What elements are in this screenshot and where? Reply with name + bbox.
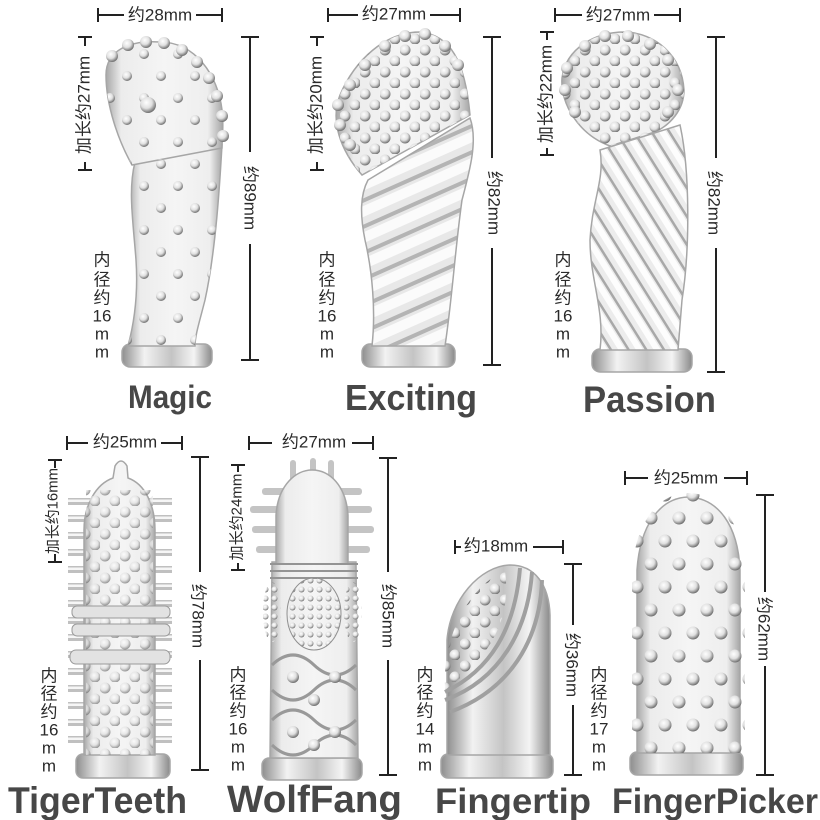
TigerTeeth base [76, 754, 170, 778]
WolfFang head [276, 470, 348, 564]
WolfFang inner diameter: 约 [230, 702, 246, 720]
Magic inner diameter: m [95, 324, 109, 344]
Passion inner diameter: 约 [554, 288, 572, 308]
Exciting extension dimension: 加长约20mm [306, 56, 326, 154]
Magic inner diameter: 16 [93, 306, 111, 326]
Magic inner diameter [93, 250, 111, 362]
Fingertip height dimension: 约36mm [562, 633, 582, 697]
WolfFang head spikes [250, 458, 374, 553]
WolfFang top width dimension: 约27mm [282, 432, 346, 452]
Exciting inner diameter: 径 [318, 270, 336, 290]
TigerTeeth body [84, 461, 155, 755]
Magic body bumps [128, 145, 222, 346]
Exciting base [362, 344, 455, 367]
product: Fingertip [441, 565, 553, 778]
WolfFang inner diameter: 内 [230, 666, 246, 684]
TigerTeeth height dimension: 约78mm [188, 584, 208, 648]
WolfFang inner diameter: m [231, 756, 245, 774]
TigerTeeth inner diameter: m [42, 756, 56, 776]
FingerPicker inner diameter: 径 [590, 684, 608, 702]
Passion extension dimension: 加长约22mm [536, 45, 556, 143]
Exciting head [332, 28, 470, 175]
FingerPicker inner diameter: 内 [590, 666, 608, 684]
Passion inner diameter: m [556, 324, 570, 344]
TigerTeeth name: TigerTeeth [8, 780, 187, 820]
Fingertip inner diameter: m [418, 738, 432, 756]
Passion inner diameter: 径 [554, 270, 572, 290]
Passion top width dimension: 约27mm [586, 6, 650, 24]
Exciting height dimension: 约82mm [484, 171, 504, 235]
TigerTeeth inner diameter: 内 [40, 666, 58, 686]
Fingertip inner diameter: 内 [416, 666, 434, 684]
Fingertip inner diameter [416, 666, 434, 774]
Passion top width dimension [555, 6, 680, 24]
FingerPicker body [637, 497, 740, 753]
WolfFang extension dimension: 加长约24mm [228, 474, 246, 560]
Fingertip curved bands [445, 568, 542, 712]
TigerTeeth top width dimension: 约25mm [93, 432, 157, 452]
TigerTeeth top width dimension [67, 432, 182, 452]
Fingertip inner diameter: 14 [416, 720, 434, 738]
Magic inner diameter: 径 [94, 270, 110, 290]
Exciting ribbed body [362, 118, 473, 346]
Magic inner diameter: 内 [94, 250, 110, 270]
WolfFang height dimension: 约85mm [378, 584, 398, 648]
Passion inner diameter: 16 [554, 306, 572, 326]
WolfFang top width dimension [249, 432, 373, 452]
Passion inner diameter [554, 250, 572, 362]
Exciting inner diameter: m [320, 342, 334, 362]
Fingertip top width dimension [455, 536, 563, 556]
product: Magic [106, 36, 229, 367]
Magic extension dimension: 加长约27mm [74, 56, 94, 154]
Exciting top width dimension: 约27mm [362, 4, 426, 24]
Exciting height dimension [483, 37, 504, 365]
WolfFang wavy bands [272, 655, 356, 755]
FingerPicker height dimension: 约62mm [754, 597, 774, 661]
Fingertip inner diameter: m [418, 756, 432, 774]
Fingertip inner diameter: 约 [416, 702, 434, 720]
WolfFang dotted oval [287, 578, 341, 650]
Fingertip body [447, 565, 550, 755]
TigerTeeth bumps [86, 490, 153, 755]
product: Passion [559, 30, 692, 372]
WolfFang inner diameter: m [231, 738, 245, 756]
Magic inner diameter: m [95, 342, 109, 362]
Exciting inner diameter: 约 [318, 288, 336, 308]
FingerPicker bumps [632, 493, 745, 753]
product: FingerPicker [630, 493, 745, 775]
Fingertip inner diameter: 径 [416, 684, 434, 702]
WolfFang bumps [287, 671, 341, 751]
Exciting inner diameter: 16 [318, 306, 336, 326]
Magic head [106, 42, 223, 165]
WolfFang rings [270, 564, 358, 578]
TigerTeeth inner diameter: 约 [40, 702, 58, 722]
FingerPicker base [630, 752, 743, 775]
FingerPicker inner diameter: 约 [590, 702, 608, 720]
Exciting inner diameter: m [320, 324, 334, 344]
product: WolfFang [250, 458, 374, 780]
Magic top width dimension [98, 6, 222, 24]
Passion height dimension [704, 37, 725, 372]
Passion height dimension: 约82mm [704, 171, 724, 235]
Exciting top width dimension [328, 4, 460, 24]
Passion ribbed body [590, 125, 688, 350]
Passion name: Passion [583, 379, 716, 420]
Magic height dimension [240, 37, 260, 360]
Fingertip bump patch [445, 570, 506, 690]
FingerPicker inner diameter: 17 [590, 720, 608, 738]
WolfFang body [270, 562, 358, 758]
product: TigerTeeth [68, 461, 172, 778]
WolfFang inner diameter [229, 666, 247, 774]
product: Exciting [332, 28, 473, 367]
Magic inner diameter: 约 [94, 288, 110, 308]
Magic base [122, 344, 212, 367]
FingerPicker height dimension [754, 495, 774, 775]
Fingertip base [441, 754, 553, 778]
Fingertip height dimension [562, 564, 582, 775]
Magic name: Magic [128, 379, 212, 415]
Fingertip name: Fingertip [435, 782, 591, 820]
TigerTeeth inner diameter: m [42, 738, 56, 758]
Fingertip top width dimension: 约18mm [464, 536, 528, 556]
Passion inner diameter: m [556, 342, 570, 362]
WolfFang base [262, 758, 362, 780]
WolfFang name: WolfFang [227, 779, 402, 820]
Magic height dimension: 约89mm [240, 166, 260, 230]
Magic top width dimension: 约28mm [128, 6, 192, 24]
WolfFang inner diameter: 16 [229, 720, 247, 738]
WolfFang inner diameter: 径 [230, 684, 246, 702]
FingerPicker inner diameter [590, 666, 608, 774]
FingerPicker inner diameter: m [592, 738, 606, 756]
TigerTeeth side pegs [68, 492, 172, 747]
Passion inner diameter: 内 [554, 250, 572, 270]
Passion head [559, 30, 684, 146]
TigerTeeth middle rings [70, 606, 170, 664]
TigerTeeth extension dimension: 加长约16mm [44, 468, 62, 554]
WolfFang height dimension [378, 458, 398, 775]
Exciting inner diameter: 内 [318, 250, 336, 270]
WolfFang side dots [263, 582, 362, 642]
Magic head bumps [106, 36, 229, 165]
TigerTeeth height dimension [188, 457, 209, 770]
FingerPicker top width dimension: 约25mm [654, 468, 718, 488]
Exciting inner diameter [318, 250, 336, 362]
TigerTeeth inner diameter: 16 [40, 720, 58, 740]
FingerPicker inner diameter: m [592, 756, 606, 774]
Magic body [128, 145, 222, 346]
TigerTeeth inner diameter: 径 [40, 684, 58, 704]
FingerPicker top width dimension [625, 468, 747, 488]
Exciting name: Exciting [345, 377, 477, 418]
TigerTeeth inner diameter [40, 666, 58, 776]
Passion base [592, 349, 692, 372]
